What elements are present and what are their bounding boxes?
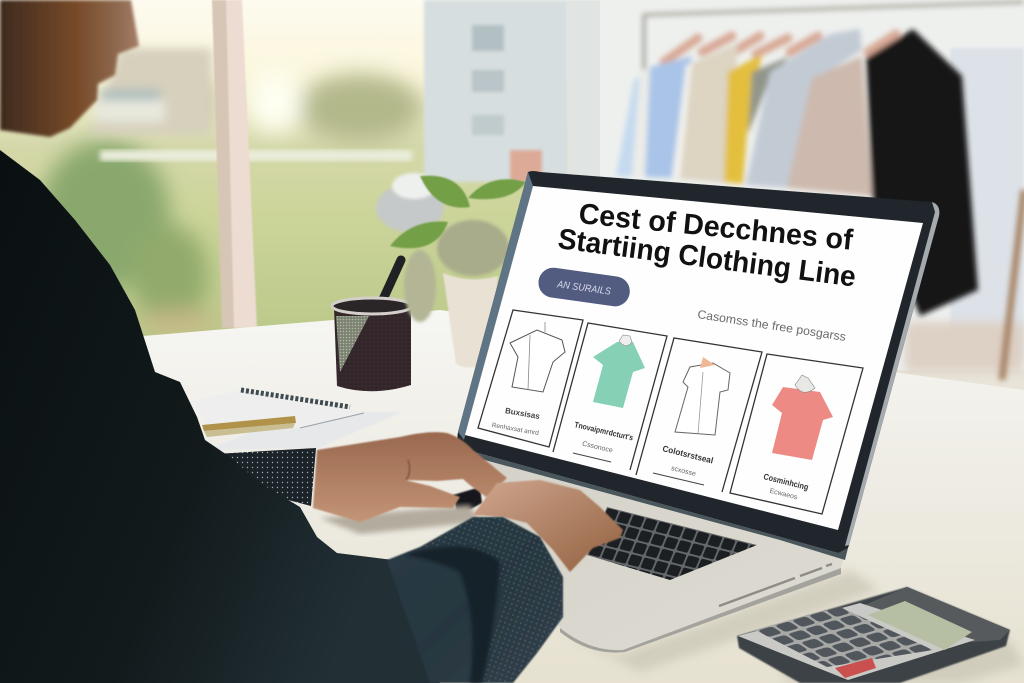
- pale blue shirt: [616, 68, 652, 177]
- notebook with gold pens: [190, 390, 364, 437]
- distant house: [90, 48, 212, 135]
- mesh highlight: [336, 316, 369, 372]
- card 4: pink shirt: Ecwaeos: [769, 488, 798, 501]
- keypad: [755, 607, 933, 667]
- screen: [465, 186, 923, 530]
- dotted shirt cuff: [215, 448, 316, 506]
- side ports: [719, 564, 832, 606]
- sleeve texture: [420, 517, 563, 683]
- calculator body: [737, 587, 1010, 683]
- card 1: white shirt: Renhaxsat amrd: [491, 422, 540, 437]
- card 1: white shirt: Buxsisas: [504, 406, 541, 421]
- calculator shadow: [770, 640, 1024, 683]
- card 2: teal shirt: Tnovaipmrdcturt's: [574, 420, 634, 443]
- screen subtitle: Casomss the free posgarss: [697, 307, 847, 344]
- card 2: teal shirt: [553, 323, 667, 470]
- clothing rack with garments: [616, 2, 1024, 380]
- card 3: white dress shirt: Colotsrstseal: [662, 443, 714, 466]
- left hand knuckle crease: [406, 460, 410, 480]
- jacket sleeve: [387, 517, 563, 683]
- calculator: [737, 587, 1024, 683]
- background: building through window: [424, 0, 568, 182]
- background: studio wall: [600, 0, 1024, 372]
- gold pens: [202, 416, 296, 431]
- beige shirt: [672, 43, 738, 183]
- display: [868, 601, 972, 650]
- white shirt: [632, 65, 655, 177]
- card 3: white dress shirt: scxosse: [670, 465, 697, 478]
- pen: [380, 260, 401, 306]
- laptop: [457, 171, 939, 672]
- faceplate: [738, 603, 975, 680]
- red key: [835, 658, 876, 678]
- yellow shirt: [724, 54, 762, 184]
- jacket body: [0, 150, 440, 683]
- hinge: [460, 448, 848, 560]
- pill button: [536, 266, 632, 308]
- pill button: AN SURAILS: [556, 279, 612, 298]
- window frame right: [567, 0, 601, 180]
- shirt icon: [510, 330, 565, 392]
- taupe jacket: [787, 56, 872, 196]
- shirt icon: [675, 363, 730, 435]
- screen title: Cest of Decchnes of: [577, 198, 854, 257]
- keyboard: [587, 507, 757, 580]
- right hand: [473, 480, 623, 572]
- window column left: [212, 0, 257, 328]
- laptop shadow: [560, 570, 880, 672]
- cup rim: [332, 298, 412, 314]
- spiral binding: [241, 390, 350, 407]
- paper stack: [207, 412, 402, 450]
- desk: [0, 310, 1024, 683]
- shirt icon: [593, 342, 645, 408]
- hanging flowers: [404, 250, 436, 322]
- leaves: [390, 176, 526, 248]
- rack rail: [643, 2, 1024, 15]
- left hand: [313, 432, 507, 522]
- card 3: white dress shirt: [636, 338, 762, 492]
- hand shadow on desk: [320, 505, 480, 534]
- hangers: [664, 34, 896, 62]
- card 2: teal shirt: Cssonoce: [581, 441, 613, 454]
- wooden stand: [1002, 190, 1024, 380]
- screen title: Startiing Clothing Line: [556, 223, 858, 294]
- potted plant: [390, 176, 526, 368]
- background: blurred garden window: [0, 0, 600, 345]
- card 4: pink shirt: [730, 354, 863, 514]
- card 1: white shirt: [478, 310, 583, 447]
- cup body: [334, 308, 411, 391]
- sleeve fold: [405, 546, 500, 683]
- shirt icon: [772, 387, 833, 460]
- black jacket: [866, 29, 978, 316]
- person: [0, 0, 623, 683]
- card 4: pink shirt: Cosminhcing: [763, 471, 810, 492]
- plant pot: [443, 273, 498, 368]
- head: [0, 0, 139, 137]
- blue shirt: [645, 56, 692, 178]
- flowers: [437, 220, 509, 276]
- screen surface: [465, 186, 923, 530]
- lid bezel: [457, 171, 939, 554]
- pencil cup: [332, 260, 412, 391]
- grey blue shirt: [746, 29, 862, 188]
- background: parked car: [376, 173, 444, 232]
- grey green shirt: [748, 56, 790, 134]
- mouse under hand: [453, 487, 482, 516]
- laptop base: [458, 442, 845, 650]
